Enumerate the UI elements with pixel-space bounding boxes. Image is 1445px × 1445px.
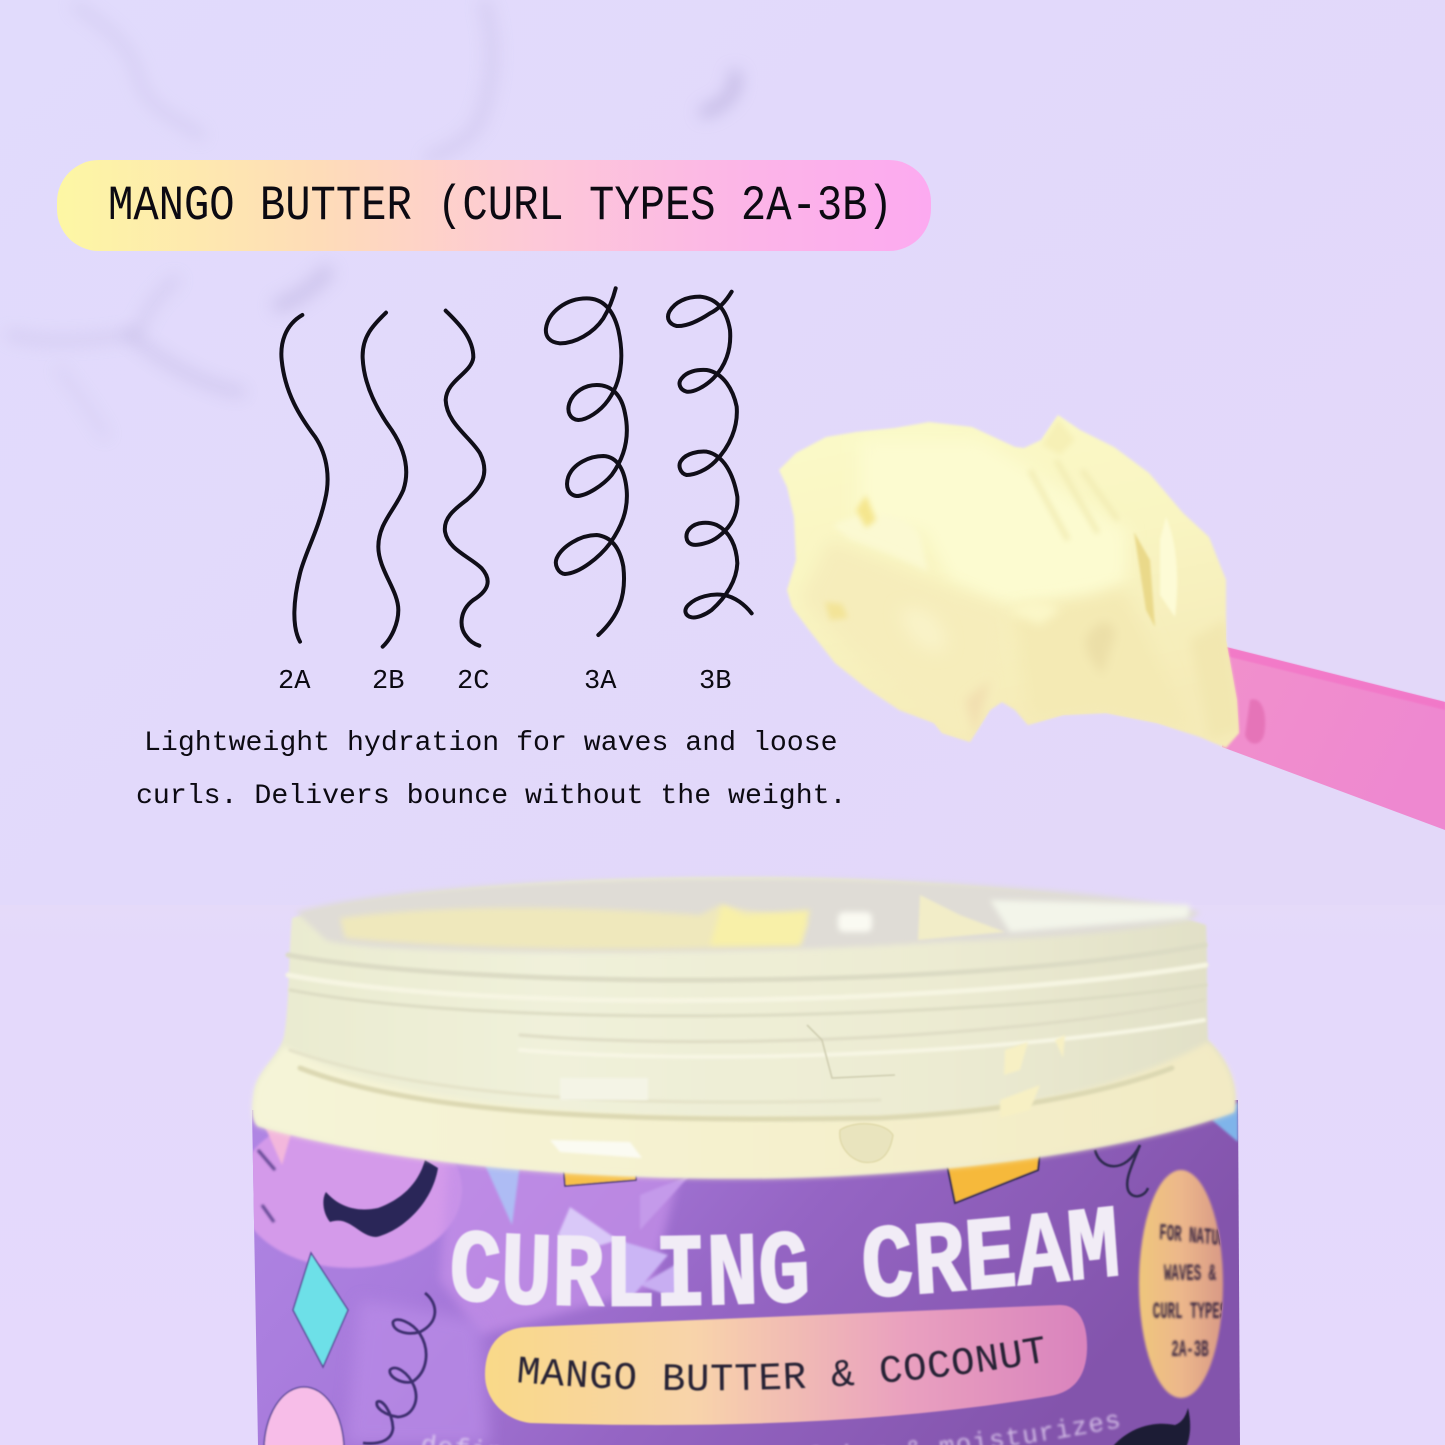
label: navy swoosh	[323, 1160, 438, 1237]
description text: curls. Delivers bounce without the weight.	[136, 781, 846, 812]
curl type diagrams	[281, 288, 752, 647]
label: badge text	[1151, 1222, 1222, 1358]
label: right squiggle	[1095, 1145, 1148, 1196]
label: pastel side panel	[440, 1164, 677, 1334]
background table surface	[0, 905, 1445, 1445]
label: cyan diamond	[293, 1253, 348, 1367]
curl 3B	[668, 292, 752, 618]
background wall	[0, 0, 1445, 905]
cream inside jar	[340, 905, 808, 949]
label: badge text: CURL TYPES	[1153, 1299, 1227, 1325]
label: blue corner	[1212, 1102, 1238, 1142]
label: pale pink arc	[252, 1135, 461, 1269]
label: product pill	[485, 1305, 1087, 1425]
label: peach circle	[1139, 1170, 1223, 1398]
curl type labels: 3B	[699, 667, 731, 697]
curl 2A	[281, 315, 328, 642]
lip glint	[550, 1140, 642, 1158]
curl type labels: 2C	[457, 667, 489, 697]
description text: Lightweight hydration for waves and loose	[144, 728, 838, 759]
label: edge squiggles	[258, 1150, 275, 1222]
curl type labels	[278, 667, 731, 697]
pink spatula	[1222, 647, 1445, 830]
jar lip	[253, 1042, 1235, 1178]
white reflection	[990, 900, 1190, 932]
glass jar neck	[253, 877, 1235, 1178]
neck threads	[288, 945, 1206, 1119]
crease mark	[807, 1025, 895, 1078]
lip droplet	[840, 1124, 893, 1163]
curl type labels: 3A	[584, 667, 617, 697]
curl 2B	[363, 313, 406, 647]
label: badge text: FOR NATURAL	[1159, 1220, 1241, 1254]
label: yellow block large	[944, 1150, 1040, 1203]
marble veins	[10, 5, 735, 435]
curl 2C	[445, 311, 488, 646]
label: badge text: WAVES &	[1164, 1261, 1217, 1287]
label: product pill text: MANGO BUTTER & COCONUT	[518, 1335, 1044, 1392]
label: lower right swoosh	[1110, 1408, 1190, 1445]
cream peak right	[918, 895, 1005, 940]
label: crystal facets	[486, 1166, 687, 1294]
cream peak left	[710, 905, 810, 945]
small highlight	[838, 912, 872, 932]
heading text: MANGO BUTTER (CURL TYPES 2A-3B)	[108, 178, 893, 234]
label: yellow block small	[562, 1172, 638, 1188]
label: top pink triangle	[265, 1128, 290, 1164]
mirror glint left	[560, 1078, 648, 1100]
curl 3A	[546, 288, 627, 635]
curl type labels: 2A	[278, 667, 311, 697]
jar rim opening	[296, 878, 1200, 952]
heading pill	[57, 160, 931, 251]
description text	[136, 728, 846, 812]
jar body	[253, 877, 1235, 1178]
jar label	[252, 1100, 1240, 1445]
scoop of cream	[779, 415, 1240, 748]
label: pink circle	[264, 1387, 344, 1445]
curl type labels: 2B	[372, 667, 404, 697]
label: badge text: 2A-3B	[1171, 1337, 1209, 1363]
label: product title: CURLING CREAM	[451, 1204, 1120, 1308]
glints right	[1000, 1035, 1065, 1118]
label: lower light patch	[345, 1300, 490, 1445]
label: left squiggle	[363, 1293, 435, 1443]
